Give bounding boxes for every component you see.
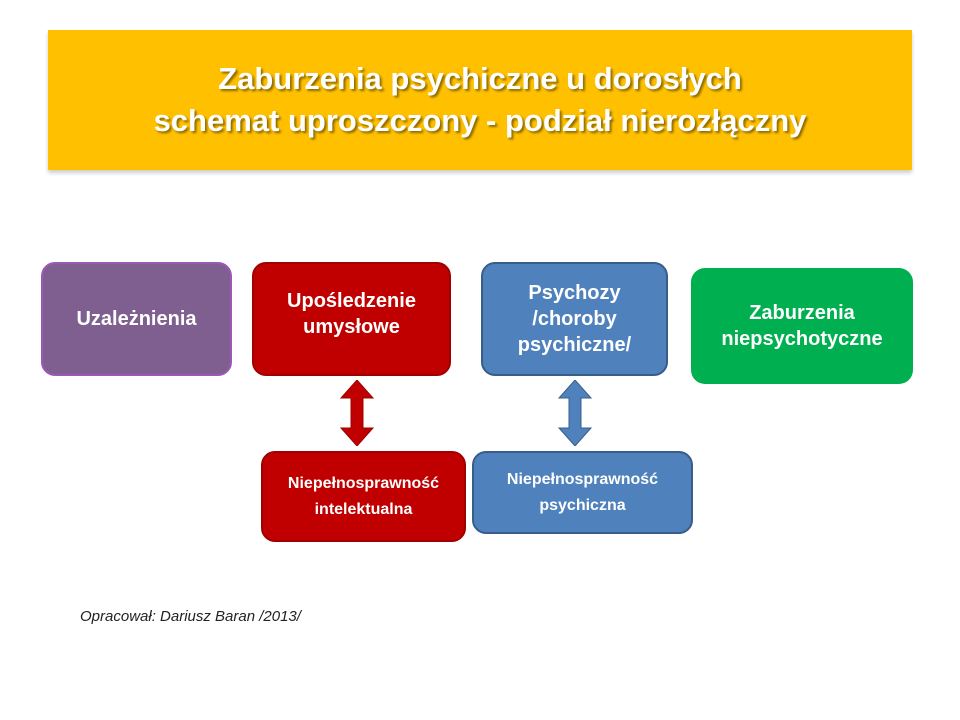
box: Uzależnienia xyxy=(41,262,232,376)
box: Niepełnosprawność intelektualna: Niepełnosprawność xyxy=(288,475,439,492)
title banner xyxy=(48,30,912,170)
box: Psychozy: Psychozy xyxy=(528,282,621,304)
footer credit: Opracował: Dariusz Baran /2013/ xyxy=(80,608,301,625)
title banner: schemat uproszczony - podział nierozłączny xyxy=(154,103,806,138)
box: Niepełnosprawność psychiczna xyxy=(472,451,693,534)
box: Psychozy: /choroby xyxy=(532,308,617,330)
box: Psychozy: psychiczne/ xyxy=(518,334,631,356)
box: Niepełnosprawność psychiczna: psychiczna xyxy=(539,497,626,514)
box: Upośledzenie umysłowe xyxy=(252,262,451,376)
title banner: Zaburzenia psychiczne u dorosłych xyxy=(218,61,742,96)
box: Zaburzenia niepsychotyczne: niepsychotyczne xyxy=(721,328,883,350)
box: Upośledzenie umysłowe: umysłowe xyxy=(303,316,400,338)
box: Zaburzenia niepsychotyczne: Zaburzenia xyxy=(749,302,855,324)
box: Zaburzenia niepsychotyczne xyxy=(691,268,913,384)
box: Uzależnienia: Uzależnienia xyxy=(76,308,197,330)
box: Psychozy xyxy=(481,262,668,376)
arrow: red double xyxy=(340,380,374,446)
box: Niepełnosprawność intelektualna xyxy=(261,451,466,542)
box: Niepełnosprawność psychiczna: Niepełnosprawność xyxy=(507,471,658,488)
box: Upośledzenie umysłowe: Upośledzenie xyxy=(287,290,416,312)
box: Niepełnosprawność intelektualna: intelektualna xyxy=(315,500,412,518)
arrow: blue double xyxy=(558,380,592,446)
